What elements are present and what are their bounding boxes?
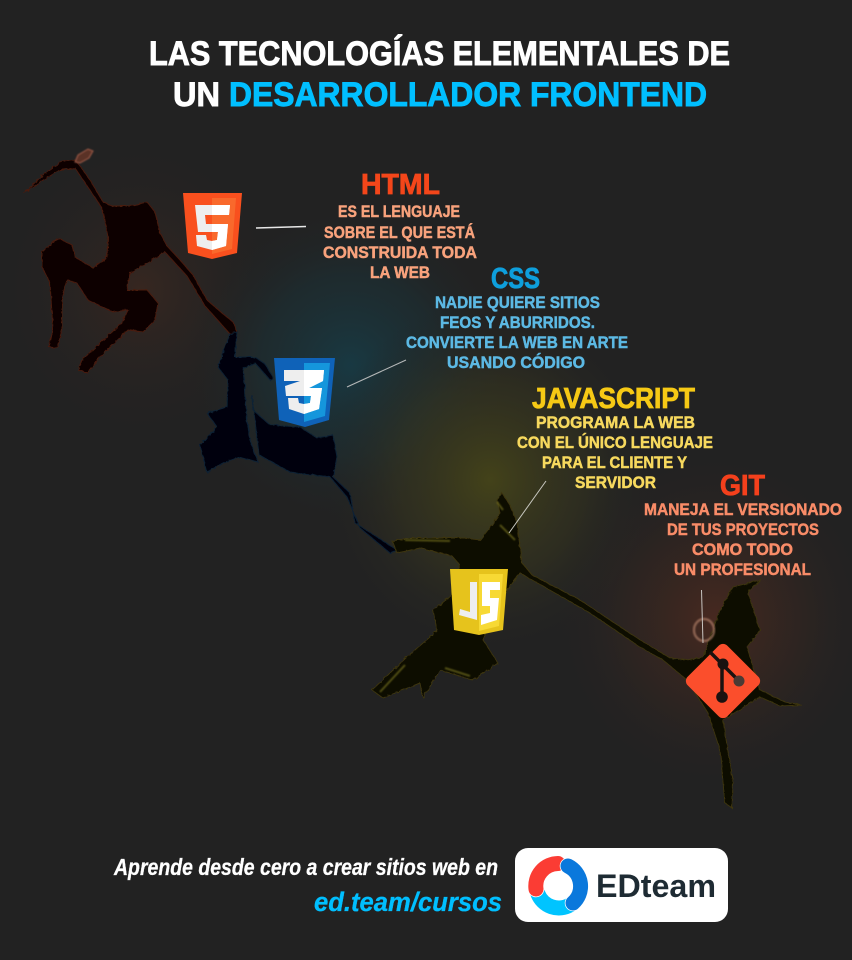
background glow: git (550, 445, 852, 795)
icon: edteam ring (536, 864, 581, 908)
text: css description: USANDO CÓDIGO (447, 353, 585, 372)
text: html description: SOBRE EL QUE ESTÁ (324, 223, 475, 242)
silhouette: css dancer (200, 332, 397, 553)
silhouette: html dancer (24, 160, 237, 373)
icon: git diamond (683, 641, 763, 721)
text: css description: FEOS Y ABURRIDOS. (440, 313, 595, 332)
text: javascript description: SERVIDOR (575, 473, 656, 492)
panel: html (183, 169, 477, 282)
text: css description: CONVIERTE LA WEB EN ARTE (406, 333, 628, 352)
call to action text: Aprende desde cero a crear sitios web en (113, 854, 498, 880)
title: UN (173, 76, 220, 114)
title: DESARROLLADOR FRONTEND (229, 76, 707, 114)
panel: javascript (450, 383, 713, 635)
background glow: css (185, 200, 515, 530)
background glow: html (0, 130, 290, 450)
hand outline: git dancer (694, 619, 714, 641)
text: html description: CONSTRUIDA TODA (323, 243, 477, 262)
title: LAS TECNOLOGÍAS ELEMENTALES DE (149, 35, 730, 73)
text: css description (406, 293, 628, 372)
text: javascript description: PROGRAMA LA WEB (536, 413, 695, 432)
connector: html (256, 226, 306, 228)
icon: html5 shield (183, 193, 242, 259)
text: html description: LA WEB (370, 263, 430, 282)
edteam logo (515, 848, 728, 922)
background glow: javascript (320, 300, 660, 660)
call to action text: ed.team/cursos (314, 887, 502, 917)
heading: css: CSS (491, 263, 540, 295)
heading: git: GIT (720, 470, 765, 502)
icon: javascript shield (450, 569, 508, 635)
text: html description (323, 202, 477, 282)
panel: git (644, 470, 842, 721)
icon: css3 shield (274, 358, 335, 427)
text: git description: DE TUS PROYECTOS (667, 520, 819, 539)
text: git description: COMO TODO (692, 540, 793, 559)
text: javascript description: CON EL ÚNICO LENGUAJE (517, 433, 713, 452)
connector: javascript (509, 481, 546, 533)
connector: css (347, 360, 406, 387)
text: css description: NADIE QUIERE SITIOS (435, 293, 600, 312)
title (149, 35, 730, 114)
heading: html: HTML (361, 169, 440, 201)
text: javascript description (517, 413, 713, 492)
heading: javascript: JAVASCRIPT (532, 383, 695, 415)
panel: css (274, 263, 628, 427)
connector: git (702, 590, 703, 643)
call to action text (113, 854, 502, 917)
hand outline: html dancer (75, 149, 93, 163)
highlights: javascript dancer (380, 502, 515, 692)
silhouette: javascript and git dancer (372, 493, 802, 808)
text: javascript description: PARA EL CLIENTE Y (542, 453, 688, 472)
text: git description (644, 500, 842, 579)
logo wordmark: EDteam (596, 868, 716, 904)
text: html description: ES EL LENGUAJE (338, 202, 460, 221)
text: git description: UN PROFESIONAL (674, 560, 811, 579)
